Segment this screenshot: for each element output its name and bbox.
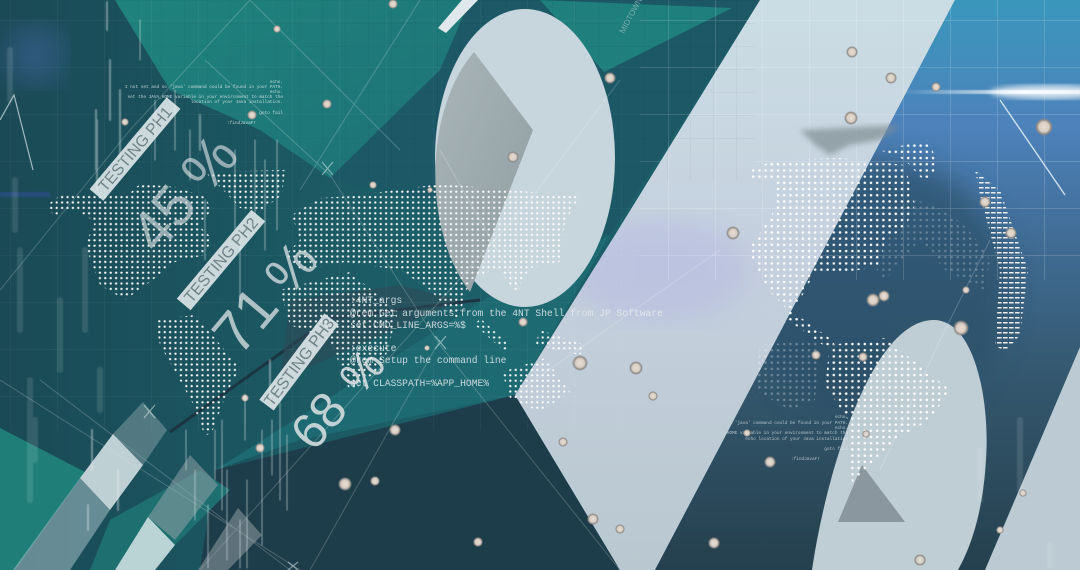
- code block: lower small: echo.: [835, 415, 848, 420]
- code block: top small: :findJavaFr: [227, 121, 256, 126]
- map: south america: [155, 315, 240, 436]
- panel: bottom right light triangle: [985, 347, 1080, 570]
- panel: upper teal shapes: [115, 0, 760, 235]
- value: 68 percent: %: [329, 338, 395, 403]
- map: indonesia: [475, 318, 585, 355]
- map: right north america: [748, 158, 915, 312]
- bottom left diamonds: [13, 402, 262, 570]
- bright line segments top left: [0, 95, 33, 170]
- panel: right blue band: [655, 0, 1080, 570]
- value: 71 percent: [200, 227, 331, 366]
- map: eurasia: [285, 184, 580, 320]
- code block: lower small: [727, 415, 848, 462]
- value: 45 percent: [118, 123, 251, 264]
- panel: light diagonal shape: [515, 0, 955, 570]
- code block: lower small: :findJavaFr: [791, 457, 820, 462]
- code block: main: :4NT_args: [350, 295, 402, 306]
- teal fine grid: [115, 0, 755, 180]
- code block: top small: goto fail: [259, 111, 283, 116]
- pie chart: upper: [435, 9, 615, 307]
- code block: main: [350, 295, 663, 389]
- code block: top small: echo.: [270, 80, 283, 85]
- code block: main: :execute: [350, 343, 397, 354]
- code block: lower small: goto fail: [824, 447, 848, 452]
- code block: top small: set the JAVA_HOME variable in your environment to match the: [128, 95, 283, 100]
- code block: top small: [125, 80, 283, 126]
- top white tag fragment: [438, 0, 478, 33]
- globe dim dots: [870, 199, 990, 290]
- code block: main: @rem Get arguments from the 4NT Shell from JP Software: [350, 308, 663, 319]
- blurred grey continent: [800, 125, 900, 155]
- light area grid: [640, 0, 1080, 280]
- value: 71 percent: %: [253, 230, 330, 305]
- blue streak left: [0, 192, 50, 197]
- code block: lower small: echo.: [835, 426, 848, 431]
- value: 68 percent: 68: [279, 381, 358, 460]
- map: right central america: [785, 310, 835, 350]
- panel: globe interior shade: [768, 146, 1016, 376]
- value: 71 percent: 71: [200, 275, 291, 366]
- bright line segments top right: [1000, 100, 1065, 195]
- world map: left dotted: [47, 170, 585, 436]
- globe arc dots: [975, 170, 1028, 352]
- code block: main: set CMD_LINE_ARGS=%$: [350, 320, 466, 331]
- globe dim map lower: [755, 340, 820, 410]
- map: right south america: [825, 338, 950, 486]
- tag: testing ph2: TESTING PH2: [182, 215, 262, 306]
- lens flare: [900, 85, 1080, 99]
- panel: lower teal bands: [0, 235, 620, 570]
- map: greenland: [205, 170, 285, 210]
- world map: right dotted: [748, 140, 950, 486]
- tag: testing ph3: TESTING PH3: [261, 316, 338, 410]
- pie chart: lower: [812, 320, 987, 570]
- tag: testing ph1: TESTING PH1: [96, 104, 176, 195]
- code block: lower small: HOME variable in your environment to match the: [727, 431, 848, 436]
- panel: lavender glow: [582, 222, 740, 314]
- code block: top small: echo.: [270, 90, 283, 95]
- map: australia: [502, 358, 570, 412]
- dark area grid: [0, 0, 640, 430]
- code block: lower small: 'java' command could be found in your PATH.: [735, 421, 848, 426]
- sparkle crosses: [144, 162, 446, 570]
- value: 45 percent: 45: [118, 173, 209, 264]
- blue glow top left: [5, 25, 65, 85]
- code block: lower small: echo location of your Java installation: [745, 437, 848, 442]
- code block: top small: location of your Java installation.: [191, 100, 283, 105]
- map: north america: [47, 184, 212, 300]
- value: 45 percent: %: [168, 123, 251, 204]
- value: 68 percent: [279, 336, 396, 460]
- map: right greenland: [880, 140, 938, 182]
- code block: top small: I not set and no 'java' command could be found in your PATH.: [125, 85, 283, 90]
- code block: main: set CLASSPATH=%APP_HOME%: [350, 378, 489, 389]
- map: africa: [280, 272, 398, 392]
- code block: main: @rem Setup the command line: [350, 355, 507, 366]
